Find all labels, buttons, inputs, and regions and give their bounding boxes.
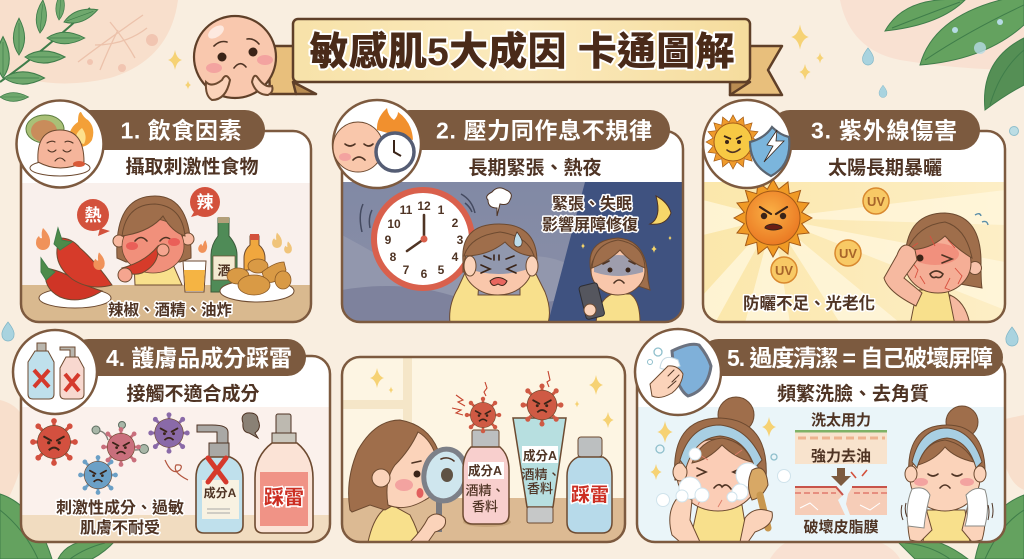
pump bottle: 成分A	[204, 485, 237, 500]
UV badge	[835, 240, 861, 266]
blue tube: 成分A	[523, 448, 557, 463]
juice glass	[183, 261, 206, 292]
card 1	[21, 131, 311, 322]
angry sun	[734, 179, 812, 257]
magnifier	[410, 446, 464, 541]
icon: hand rubbing shield	[635, 329, 721, 415]
scene caption	[56, 498, 184, 537]
title text: 敏感肌5大成因 卡通圖解	[310, 30, 734, 74]
green bottle	[211, 217, 237, 292]
scene caption: 緊張、失眠	[552, 195, 632, 213]
scene caption: 防曬不足、光老化	[743, 293, 875, 313]
clock: 1	[438, 203, 445, 217]
spray bottle	[255, 414, 313, 533]
scene: sun, UV, girl	[703, 179, 1005, 325]
panel 5: over cleansing	[635, 329, 1005, 542]
pill heading: 3. 紫外線傷害	[811, 118, 957, 144]
scene caption	[542, 195, 638, 234]
light blue bottle	[567, 437, 612, 533]
scene caption: 影響屏障修復	[542, 215, 638, 234]
sunburned girl	[884, 213, 988, 325]
scene caption: 肌膚不耐受	[80, 518, 160, 537]
skin barrier diagram: 洗太用力	[811, 411, 871, 429]
clock: 5	[438, 263, 445, 277]
panel 1: diet	[16, 100, 311, 323]
clock: 8	[390, 250, 397, 264]
UV badge: UV	[775, 263, 793, 278]
clock	[374, 190, 472, 288]
speech bubble hot	[77, 199, 110, 236]
pink bottle	[463, 430, 509, 524]
clock: 9	[385, 233, 392, 247]
skin barrier diagram: 強力去油	[811, 447, 871, 465]
pill heading	[770, 110, 980, 150]
spray bottle: 踩雷	[264, 486, 304, 509]
phone girl	[578, 238, 650, 323]
scene: clock and stressed girls	[342, 182, 683, 323]
UV badge	[863, 188, 889, 214]
pill heading	[700, 339, 1003, 376]
caption: 辣椒、酒精、油炸	[108, 300, 232, 319]
light blue bottle: 踩雷	[571, 484, 609, 506]
leaves bottom left	[0, 494, 115, 559]
scene: girl eating chili	[21, 183, 311, 323]
clock: 3	[457, 233, 464, 247]
card border mid	[342, 357, 625, 542]
skin barrier diagram	[795, 411, 887, 536]
card border 2	[342, 131, 683, 322]
pump bottle	[196, 425, 243, 533]
pink bottle: 成分A	[468, 463, 502, 478]
clock: 12	[417, 199, 431, 213]
card border 5	[637, 356, 1005, 542]
scene: washing girls	[637, 397, 1005, 542]
moon	[650, 196, 671, 224]
subtitle: 攝取刺激性食物	[125, 155, 259, 178]
UV badge: UV	[867, 194, 885, 209]
UV badge: UV	[839, 246, 857, 261]
subtitle: 太陽長期暴曬	[828, 157, 942, 179]
panel 3: UV	[703, 100, 1005, 325]
clock: 11	[400, 203, 413, 217]
card 4	[21, 356, 330, 542]
blue tube	[513, 418, 566, 523]
pill heading: 2. 壓力同作息不規律	[436, 118, 652, 144]
icon: stressed food	[16, 100, 104, 188]
scrubbing girl	[656, 397, 790, 542]
card 3	[703, 131, 1005, 322]
panel 2: stress	[333, 100, 683, 323]
card border 3	[703, 131, 1005, 322]
card border 4	[21, 356, 330, 542]
card 2	[342, 131, 683, 322]
panel: product check	[342, 357, 625, 542]
clock: 10	[387, 217, 401, 231]
angry germs	[452, 371, 563, 433]
panel 4: skincare ingredients	[13, 330, 330, 542]
subtitle: 長期緊張、熱夜	[468, 156, 602, 179]
blue tube: 香料	[527, 481, 553, 496]
leaves bottom right	[898, 495, 1024, 559]
ribbon tails	[268, 46, 782, 95]
water drops and sparkles	[2, 24, 1018, 346]
blue tube: 酒精、	[521, 467, 561, 482]
pill heading: 1. 飲食因素	[120, 118, 242, 144]
card border 1	[21, 131, 311, 322]
leaf branch top left	[0, 0, 100, 101]
pill heading	[70, 110, 265, 150]
green bottle: 酒	[217, 263, 231, 278]
speech bubble spicy	[190, 187, 220, 217]
UV badge	[771, 257, 797, 283]
card 5	[637, 356, 1005, 542]
speech bubble spicy: 辣	[196, 192, 214, 212]
mascot sad skin face	[194, 16, 276, 100]
icon: bottles crossed	[13, 330, 97, 414]
pill heading	[390, 110, 670, 150]
pink bottle: 酒精、	[465, 483, 505, 498]
icon: tired face and clock	[333, 100, 421, 188]
speech bubble hot: 熱	[84, 206, 102, 225]
subtitle: 頻繁洗臉、去角質	[777, 382, 929, 405]
banner body	[293, 19, 750, 82]
card mid	[342, 357, 625, 542]
clock: 6	[421, 267, 428, 281]
towel girl	[901, 406, 993, 542]
viruses	[30, 412, 190, 495]
clock: 7	[403, 263, 410, 277]
leaves top right	[885, 0, 1024, 110]
pill heading: 4. 護膚品成分踩雷	[106, 345, 292, 371]
scene: viruses and bottles	[21, 407, 330, 542]
scene caption: 刺激性成分、過敏	[56, 498, 184, 517]
clock: 4	[452, 250, 459, 264]
title banner	[268, 19, 782, 95]
stressed girl	[450, 224, 549, 323]
magnifying girl	[349, 420, 439, 542]
pill heading: 5. 過度清潔 = 自己破壞屏障	[727, 345, 993, 371]
clock: 2	[452, 216, 459, 230]
pill heading	[70, 339, 306, 376]
pink bottle: 香料	[472, 499, 498, 514]
skin barrier diagram: 破壞皮脂膜	[803, 518, 879, 536]
icon: sun and cracked shield	[703, 100, 791, 188]
subtitle: 接觸不適合成分	[126, 382, 260, 405]
scene: magnifier and bottles	[342, 357, 625, 542]
